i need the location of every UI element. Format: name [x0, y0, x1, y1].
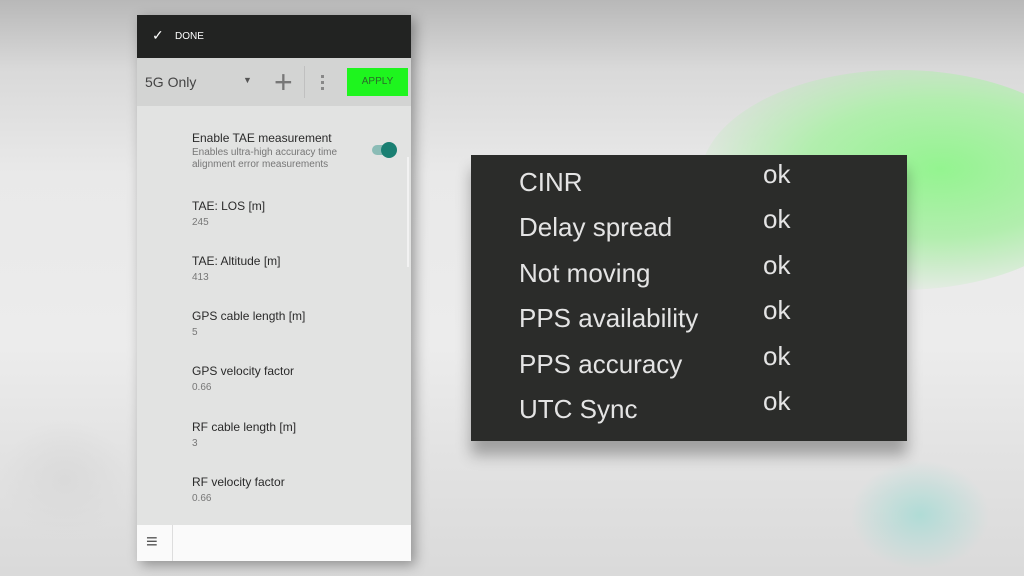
text: 5: [192, 327, 198, 338]
toolbar: ▼: [243, 75, 252, 85]
footer bar: [137, 525, 411, 561]
text: ok: [763, 159, 790, 189]
header bar: done: DONE: [175, 31, 204, 42]
text: ok: [763, 295, 790, 325]
apply button: [347, 68, 408, 96]
apply button: APPLY: [362, 76, 393, 87]
text: 0.66: [192, 493, 211, 504]
text: ok: [763, 204, 790, 234]
toolbar: [137, 58, 411, 106]
text: ok: [763, 341, 790, 371]
text: PPS availability: [519, 303, 698, 333]
background blob: teal: [850, 460, 990, 570]
toggle: [372, 145, 396, 155]
text: RF velocity factor: [192, 475, 285, 489]
settings items: alignment error measurements: [192, 159, 328, 170]
text: TAE: Altitude [m]: [192, 254, 280, 268]
text: ok: [763, 250, 790, 280]
settings items: Enable TAE measurement: [192, 131, 332, 145]
text: TAE: LOS [m]: [192, 199, 265, 213]
text: GPS velocity factor: [192, 364, 294, 378]
text: RF cable length [m]: [192, 420, 296, 434]
left shadow blur: [0, 420, 130, 540]
text: 3: [192, 438, 198, 449]
text: CINR: [519, 167, 583, 197]
header bar: done: [137, 15, 411, 58]
text: ok: [763, 386, 790, 416]
toolbar: 5G Only: [145, 74, 196, 90]
toolbar: +: [274, 64, 293, 100]
text: 245: [192, 217, 209, 228]
text: Not moving: [519, 258, 650, 288]
settings items: [192, 131, 337, 170]
header bar: done: ✓: [152, 27, 164, 43]
text: PPS accuracy: [519, 349, 682, 379]
status panel: [471, 155, 907, 441]
settings items: Enables ultra-high accuracy time: [192, 147, 337, 158]
phone settings panel: [137, 15, 411, 561]
text: Delay spread: [519, 212, 672, 242]
text: UTC Sync: [519, 394, 637, 424]
background blob: green: [700, 70, 1024, 290]
text: 0.66: [192, 382, 211, 393]
footer bar: ≡: [146, 531, 158, 553]
text: 413: [192, 272, 209, 283]
scrollbar: [407, 157, 409, 267]
text: GPS cable length [m]: [192, 309, 305, 323]
